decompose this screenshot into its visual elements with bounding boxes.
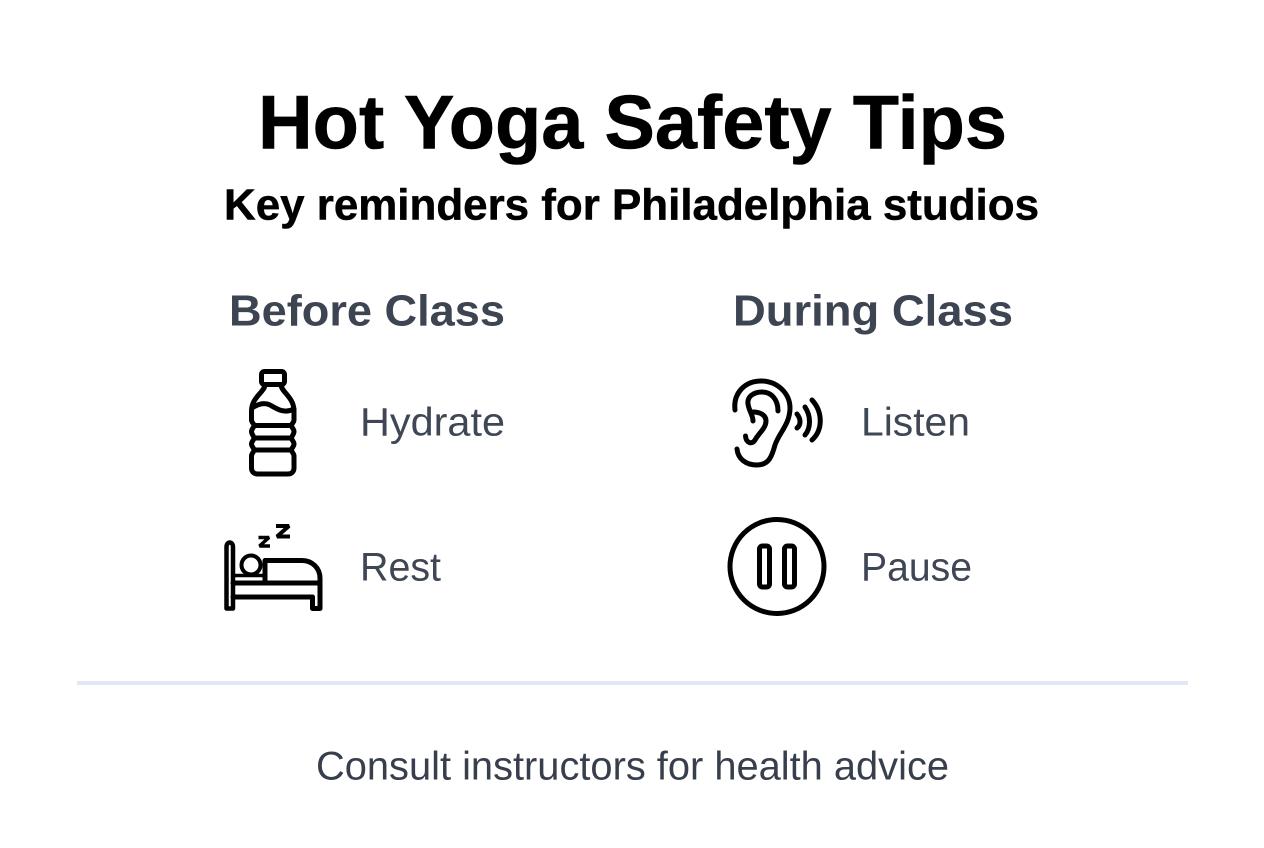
icon: water bottle (252, 372, 294, 474)
panel: before class (226, 286, 505, 608)
label: pause: Pause (861, 546, 972, 590)
label: listen: Listen (861, 400, 970, 444)
heading: during class: During Class (733, 286, 1013, 336)
icon: ear with sound waves (735, 381, 820, 465)
label: rest: Rest (360, 546, 441, 590)
footer note: Consult instructors for health advice (316, 744, 949, 788)
icon: person sleeping in bed (226, 526, 320, 608)
heading: before class: Before Class (229, 286, 505, 336)
subtitle: Key reminders for Philadelphia studios (224, 180, 1039, 230)
panel: during class (730, 286, 1013, 614)
title: Hot Yoga Safety Tips (258, 80, 1007, 166)
icon: pause button (730, 520, 824, 614)
label: hydrate: Hydrate (360, 400, 505, 444)
